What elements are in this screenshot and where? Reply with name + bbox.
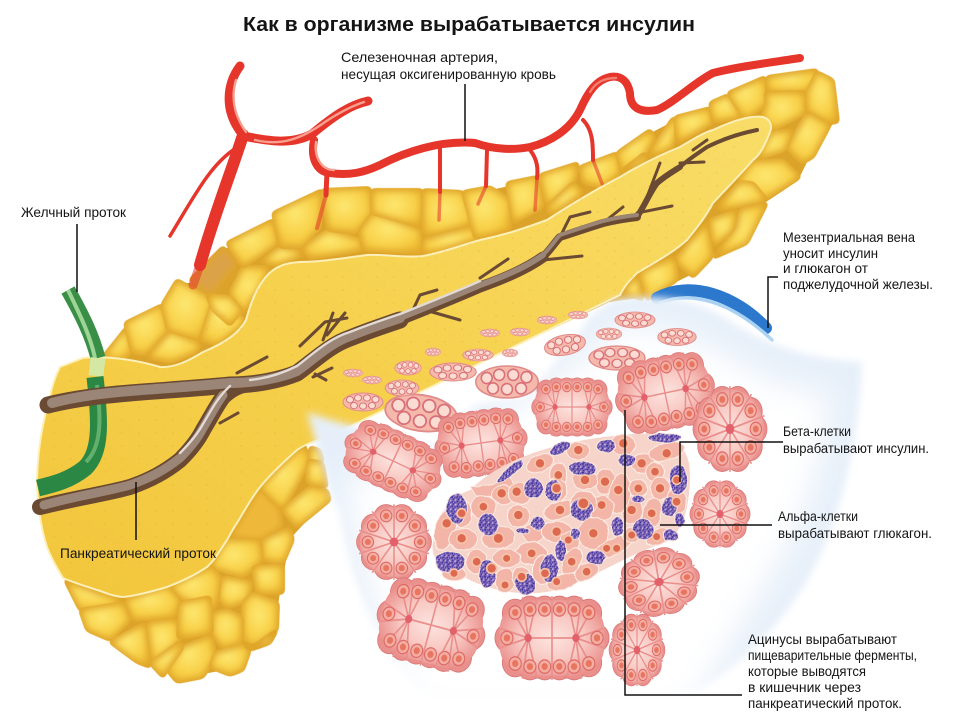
label: acini: которые выводятся [748, 664, 866, 679]
leader lines [77, 84, 783, 695]
label: alpha cells: Альфа-клетки [778, 509, 858, 524]
stippled texture [37, 117, 763, 587]
label: alpha cells [778, 509, 932, 541]
label: mesenteric vein: уносит инсулин [783, 246, 878, 261]
label: mesenteric vein: и глюкагон от [783, 261, 868, 276]
islet base mass [433, 434, 690, 593]
label: beta cells: вырабатывают инсулин. [783, 441, 929, 456]
label: acini [748, 632, 917, 711]
cut surface of the gland [37, 117, 771, 597]
label: mesenteric vein: поджелудочной железы. [783, 277, 933, 292]
label: alpha cells: вырабатывают глюкагон. [778, 526, 932, 541]
label: mesenteric vein: Мезентриальная вена [783, 230, 915, 245]
blue mesenteric vein [657, 290, 772, 340]
large acini [333, 346, 767, 686]
label: bile duct: Желчный проток [21, 205, 127, 220]
label: mesenteric vein [783, 230, 933, 292]
label: spleen artery: несущая оксигенированную кровь [341, 67, 556, 82]
red spleen artery [170, 58, 800, 285]
label: beta cells [783, 424, 929, 456]
magnified tissue field [307, 297, 862, 716]
pale blue field background [307, 297, 862, 695]
title: Как в организме вырабатывается инсулин [243, 13, 695, 36]
white field centre [345, 325, 830, 716]
label: acini: Ацинусы вырабатывают [748, 632, 897, 647]
islet cell nuclei [442, 438, 681, 589]
green bile duct [38, 290, 99, 488]
label: pancreatic duct: Панкреатический проток [60, 546, 217, 561]
label: spleen artery [341, 50, 556, 82]
label: acini: в кишечник через [748, 680, 861, 695]
pancreas base body [38, 70, 838, 682]
brown pancreatic duct tree [40, 130, 757, 507]
label: spleen artery: Селезеночная артерия, [341, 50, 498, 65]
small acinus clusters fading into the gland [343, 311, 696, 436]
label: acini: панкреатический проток. [748, 696, 902, 711]
pink islet cells [430, 434, 687, 594]
illustration: pancreas [37, 58, 862, 716]
label: acini: пищеварительные ферменты, [748, 648, 917, 663]
yellow lobules [65, 70, 838, 682]
label: beta cells: Бета-клетки [783, 424, 851, 439]
blue alpha-cell granules [435, 433, 688, 595]
islet of Langerhans [430, 433, 690, 595]
